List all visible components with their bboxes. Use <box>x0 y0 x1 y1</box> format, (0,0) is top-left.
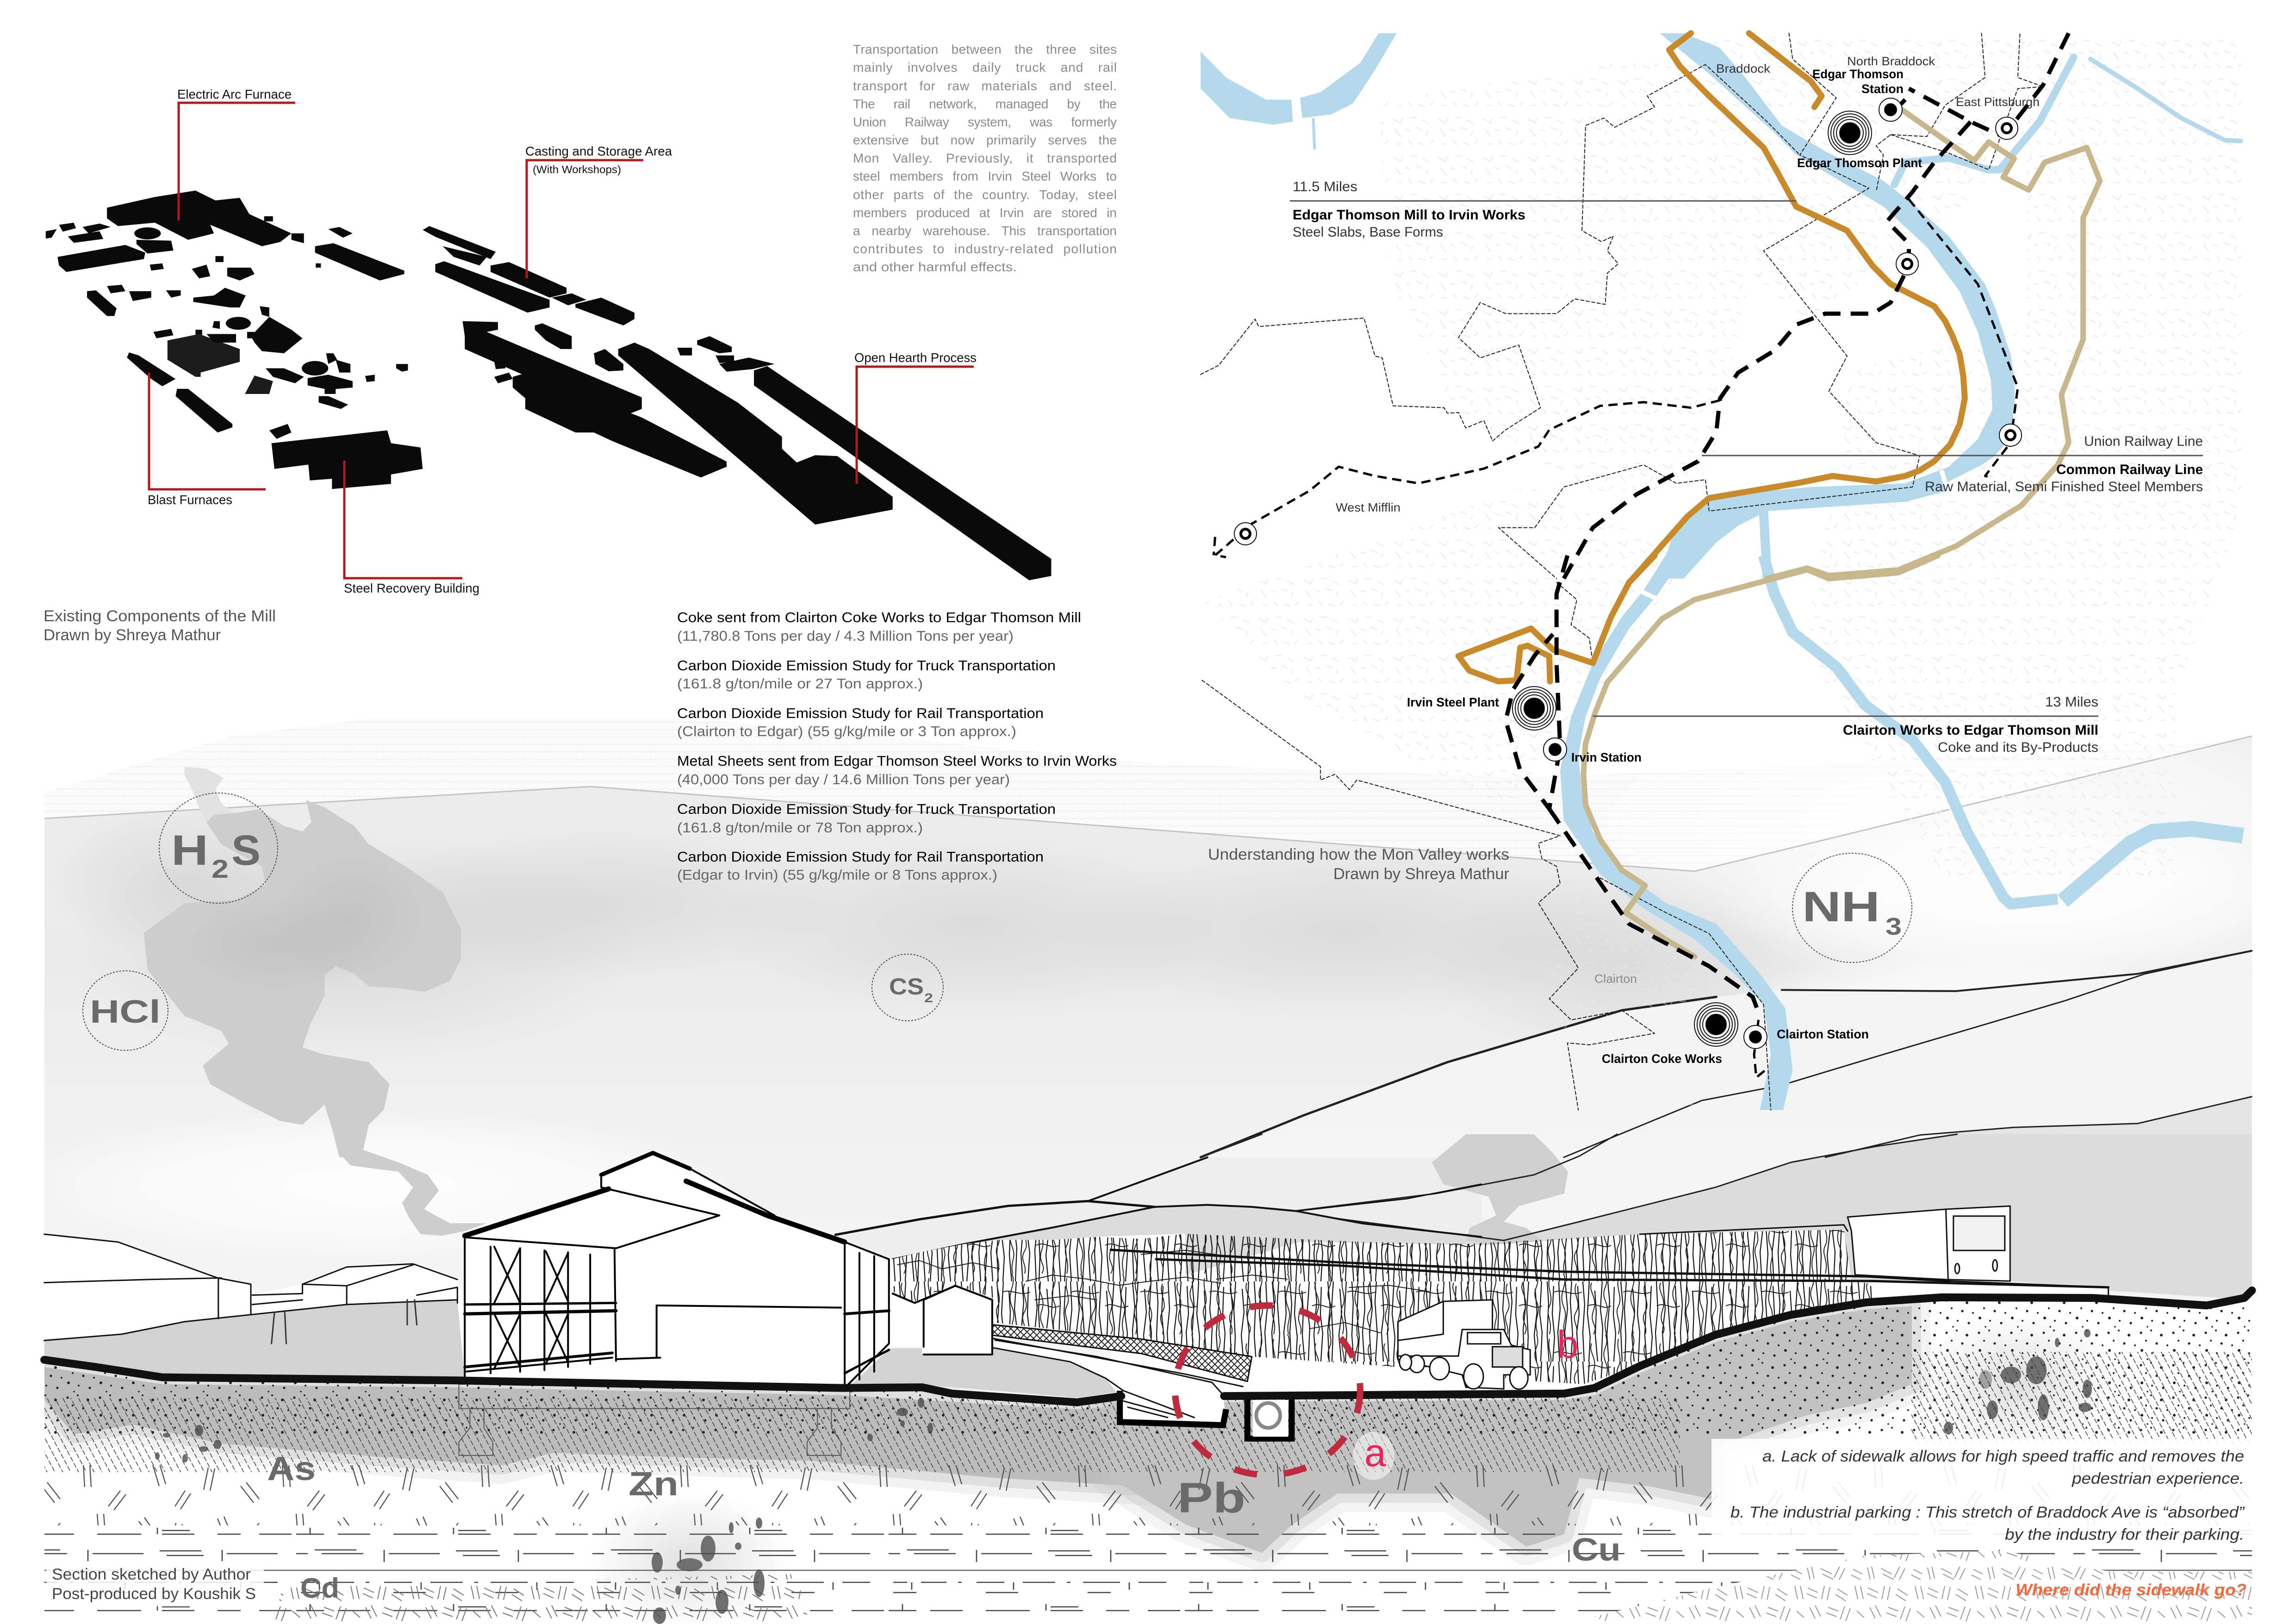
map place labels: Clairton <box>1594 972 1637 986</box>
route: Edgar Thomson to Irvin (orange) <box>1458 33 1965 681</box>
text: emissions data list: Carbon Dioxide Emission Study for Rail Transportation <box>677 849 1044 865</box>
text: emissions data list: Carbon Dioxide Emission Study for Rail Transportation <box>677 705 1044 721</box>
gas: NH3 <box>1792 853 1912 962</box>
text: emissions data list: Carbon Dioxide Emission Study for Truck Transportation <box>677 657 1056 674</box>
gas: H2S: 2 <box>212 854 229 883</box>
icon: bus <box>1848 1206 2010 1281</box>
route annotation: 13 miles: Clairton Works to Edgar Thomson Mill <box>1843 723 2098 738</box>
section credits: Post-produced by Koushik S <box>52 1585 256 1603</box>
element labels: Pb <box>1177 1474 1245 1522</box>
section sketch: trees and road <box>853 1206 2109 1458</box>
marker: stop East Pittsburgh <box>1996 117 2018 139</box>
railway: union railway line (medium dashed) <box>1213 199 2018 1077</box>
route annotation: 13 miles <box>1843 694 2098 755</box>
foundations <box>459 1384 850 1455</box>
section sketch: foreground hill and left houses <box>44 1234 465 1381</box>
text: emissions data list: (11,780.8 Tons per day / 4.3 Million Tons per year) <box>677 628 1014 644</box>
text: transportation paragraph <box>853 42 1117 274</box>
rivers <box>1201 33 2243 1110</box>
text: transportation paragraph: Mon Valley. Previously, it transported <box>853 151 1117 165</box>
gas labels <box>83 793 1912 1050</box>
gas: HCl: HCl <box>90 993 161 1030</box>
marker: Edgar Thomson Plant <box>1828 111 1872 155</box>
route annotation: 11.5 miles: Edgar Thomson Mill to Irvin Works <box>1293 207 1525 223</box>
marker: Irvin Steel Plant <box>1512 687 1556 730</box>
component labels: Electric Arc Furnace <box>177 87 292 101</box>
text: emissions data list: Metal Sheets sent from Edgar Thomson Steel Works to Irvin Works <box>677 753 1117 769</box>
callout lines <box>149 103 974 578</box>
caption: existing components: Existing Components of the Mill <box>44 607 276 625</box>
map place labels: Clairton Station <box>1777 1027 1869 1041</box>
route: Clairton Works to Edgar Thomson (beige) <box>1583 107 2100 956</box>
callout: red dashed circle and markers: b <box>1557 1323 1579 1366</box>
ground line <box>44 1291 2252 1402</box>
caption box: sidewalk notes: b. The industrial parking : This stretch of Braddock Ave is “absorbed” <box>1730 1504 2245 1521</box>
element labels: Cu <box>1572 1531 1621 1568</box>
component labels: Blast Furnaces <box>148 493 232 507</box>
text: emissions data list: (161.8 g/ton/mile or 78 Ton approx.) <box>677 819 923 836</box>
map urban texture <box>1203 33 2243 1111</box>
text: transportation paragraph: a nearby warehouse. This transportation <box>853 224 1117 238</box>
caption: existing components <box>44 607 276 644</box>
map caption <box>1208 846 1509 883</box>
caption box: sidewalk notes <box>1711 1439 2252 1548</box>
callout: red dashed circle and markers <box>1175 1305 1579 1480</box>
route annotation: 13 miles: 13 Miles <box>2045 694 2098 710</box>
caption box: sidewalk notes: a. Lack of sidewalk allows for high speed traffic and removes the <box>1762 1448 2244 1465</box>
component labels: Steel Recovery Building <box>344 581 479 595</box>
section: background hills <box>835 951 2252 1302</box>
text: transportation paragraph: contributes to industry-related pollution <box>853 242 1117 256</box>
route annotation: railway lines: Common Railway Line <box>2056 462 2203 477</box>
text: transportation paragraph: other parts of the country. Today, steel <box>853 187 1117 202</box>
road barrier <box>993 1325 1251 1380</box>
map place labels: North Braddock <box>1847 54 1935 68</box>
component labels: (With Workshops) <box>533 163 621 175</box>
building masses <box>46 191 1051 580</box>
element labels: Zn <box>628 1466 678 1503</box>
component labels: Open Hearth Process <box>854 350 977 365</box>
marker: Irvin Station <box>1543 738 1567 761</box>
map place labels: East Pittsburgh <box>1956 95 2040 109</box>
plant markers <box>1234 98 2022 1049</box>
route annotation: 11.5 miles <box>1293 179 1525 240</box>
section: ground and soil layers <box>44 1227 2252 1624</box>
map place labels: Edgar Thomson Plant <box>1797 156 1922 170</box>
gas: NH3: 3 <box>1885 913 1902 940</box>
text: emissions data list: (Clairton to Edgar) (55 g/kg/mile or 3 Ton approx.) <box>677 723 1016 739</box>
text: emissions data list: (161.8 g/ton/mile or 27 Ton approx.) <box>677 675 923 692</box>
marker: stop upper river <box>1896 253 1918 275</box>
text: transportation paragraph: and other harmful effects. <box>853 260 1017 274</box>
gray ground under overpass <box>853 1347 1123 1398</box>
text: transportation paragraph: transport for raw materials and steel. <box>853 79 1117 93</box>
text: transportation paragraph: mainly involves daily truck and rail <box>853 60 1117 75</box>
marker: Clairton Station <box>1744 1025 1767 1049</box>
route annotation: 11.5 miles: Steel Slabs, Base Forms <box>1293 225 1443 240</box>
map place labels: Irvin Station <box>1571 750 1642 764</box>
map caption: Understanding how the Mon Valley works <box>1208 846 1509 863</box>
axonometric mill drawing <box>46 87 1051 595</box>
text: transportation paragraph: Union Railway system, was formerly <box>853 115 1117 129</box>
municipal boundaries (thin dashed) <box>1201 33 2043 1110</box>
soil wash <box>44 1306 1912 1553</box>
gas: H2S: S <box>231 827 261 874</box>
gas: H2S: H <box>171 827 208 874</box>
map place labels: Irvin Steel Plant <box>1407 695 1499 709</box>
marker: stop union line <box>1999 424 2022 446</box>
text: emissions data list: (Edgar to Irvin) (55 g/kg/mile or 8 Tons approx.) <box>677 867 997 883</box>
route annotation: railway lines: Raw Material, Semi Finished Steel Members <box>1925 479 2203 494</box>
map place labels <box>1336 54 2040 1066</box>
route annotation: 13 miles: Coke and its By-Products <box>1938 740 2098 755</box>
text: emissions data list: (40,000 Tons per day / 14.6 Million Tons per year) <box>677 771 1010 787</box>
caption box: sidewalk notes: pedestrian experience. <box>2072 1470 2244 1487</box>
text: transportation paragraph: steel members from Irvin Steel Works to <box>853 169 1117 183</box>
map place labels: Edgar Thomson <box>1812 67 1904 81</box>
gas: CS2: 2 <box>924 991 933 1005</box>
section credits: Section sketched by Author <box>52 1566 251 1583</box>
component labels <box>148 87 977 595</box>
map place labels: West Mifflin <box>1336 500 1400 514</box>
map place labels: Braddock <box>1716 62 1771 75</box>
text: emissions data list <box>677 609 1117 883</box>
text: emissions data list: Carbon Dioxide Emission Study for Truck Transportation <box>677 801 1056 817</box>
route annotation: railway lines <box>1925 434 2203 494</box>
text: transportation paragraph: Transportation between the three sites <box>853 42 1117 56</box>
element labels: Cd <box>300 1573 339 1604</box>
text: emissions data list: Coke sent from Clairton Coke Works to Edgar Thomson Mill <box>677 609 1081 625</box>
component labels: Casting and Storage Area <box>525 144 672 158</box>
plume of smoke: left <box>144 767 487 1236</box>
section credits <box>46 1561 264 1606</box>
route annotation: railway lines: Union Railway Line <box>2084 434 2203 449</box>
marker: stop West Mifflin <box>1234 523 1257 545</box>
gas: CS2: CS <box>889 974 924 999</box>
element labels: As <box>267 1450 316 1487</box>
gas: HCl <box>83 971 168 1050</box>
text: transportation paragraph: members produced at Irvin are stored in <box>853 206 1117 220</box>
element labels <box>267 1450 1621 1604</box>
map place labels: Clairton Coke Works <box>1602 1052 1722 1066</box>
tree canopy scribbles <box>897 1250 1429 1333</box>
route annotation: 11.5 miles: 11.5 Miles <box>1293 179 1357 194</box>
map: Mon Valley transport network <box>1201 33 2243 1111</box>
contamination blots <box>155 1310 2124 1624</box>
caption box: sidewalk notes: by the industry for their parking. <box>2005 1526 2244 1543</box>
section sketch: industrial building <box>465 1153 992 1384</box>
leader lines <box>1290 201 2203 716</box>
caption: existing components: Drawn by Shreya Mathur <box>44 626 221 644</box>
gas: CS2 <box>872 954 943 1021</box>
marker: Clairton Coke Works <box>1694 1003 1738 1046</box>
section: sky wash background <box>44 722 2252 1378</box>
overhead lines <box>1111 1225 2109 1295</box>
heading: where did the sidewalk go: Where did the sidewalk go? <box>2016 1581 2246 1599</box>
overpass road and underpass <box>990 1324 1292 1438</box>
gas: H2S <box>159 793 278 903</box>
text: transportation paragraph: The rail network, managed by the <box>853 97 1117 111</box>
icon: truck <box>1398 1300 1530 1389</box>
marker: Edgar Thomson Station <box>1879 98 1902 121</box>
text: transportation paragraph: extensive but now primarily serves the <box>853 133 1117 147</box>
railway: common railway line (thick dashed) <box>1506 33 2069 1016</box>
map caption: Drawn by Shreya Mathur <box>1333 865 1509 883</box>
gas: NH3: NH <box>1802 883 1880 931</box>
map place labels: Station <box>1861 82 1904 96</box>
callout: red dashed circle and markers: a <box>1364 1431 1386 1474</box>
